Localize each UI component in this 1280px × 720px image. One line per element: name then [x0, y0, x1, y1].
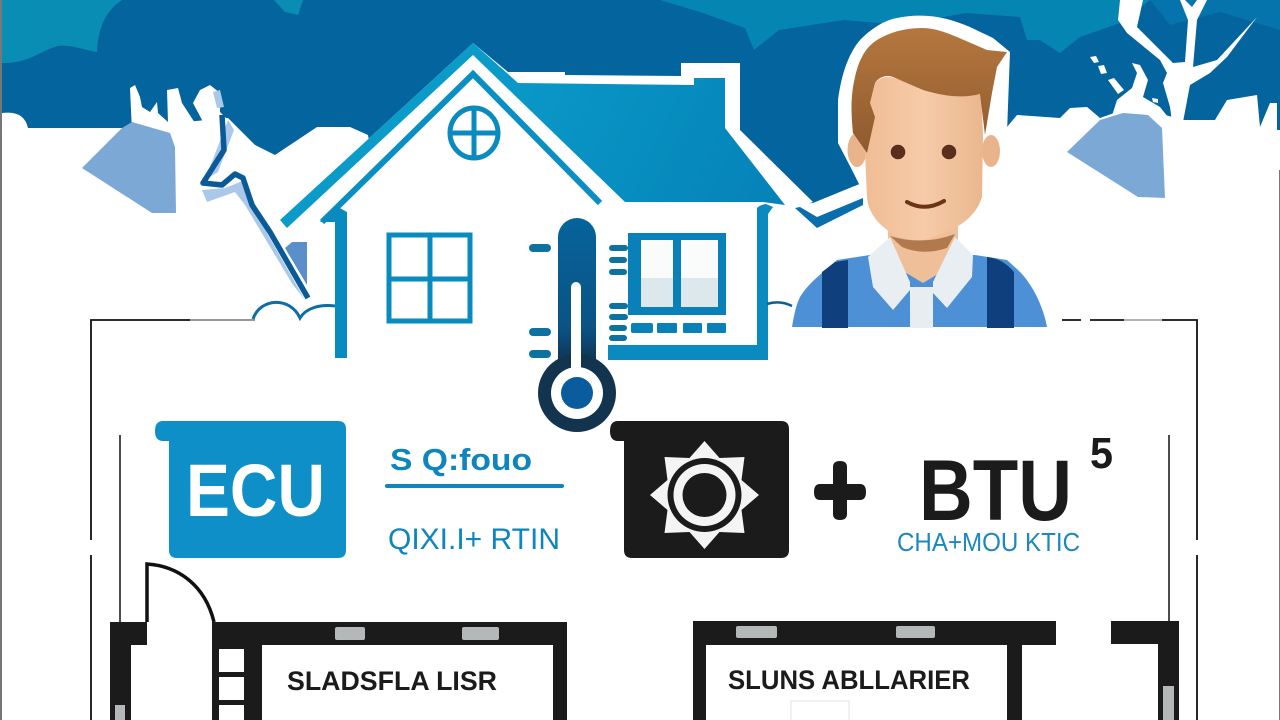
eyes: [891, 145, 905, 159]
small mark beside person: [767, 302, 792, 306]
ECU badge: ECU: [186, 449, 325, 532]
crack in the snow: [202, 90, 308, 300]
neck: [888, 225, 958, 283]
panel: left floor plan: [110, 622, 567, 720]
collar right: [933, 237, 973, 308]
ECU label text: [385, 442, 564, 556]
panel: far right wall: [1111, 621, 1179, 720]
house walls: [320, 204, 773, 360]
icon: blue rock left: [82, 122, 176, 213]
right window: [628, 233, 726, 315]
ECU label text: S Q:fouo: [390, 442, 532, 477]
thermometer tube: [558, 218, 596, 375]
round attic window: [450, 108, 498, 158]
thermometer bulb: [538, 354, 616, 432]
BTU heading: BTU: [919, 443, 1072, 539]
thermometer ticks: [529, 244, 628, 358]
faint square: [791, 701, 849, 720]
background: snowy landscape: [2, 95, 1280, 330]
ladder openings: [219, 649, 244, 720]
BTU caption: CHA+MOU KTIC: [897, 527, 1080, 557]
suspender right: [987, 257, 1014, 328]
ears: [848, 133, 866, 167]
shirt: [792, 255, 1047, 327]
background: winter sky: [0, 0, 1280, 235]
icon: blue rock right: [1067, 113, 1165, 198]
sun badge: [610, 421, 789, 558]
grey lights: [736, 626, 935, 638]
person: [792, 16, 1047, 328]
window sill blocks: [631, 323, 726, 333]
icon: sun: [650, 441, 759, 549]
panel title: SLUNS ABLLARIER: [728, 665, 970, 695]
ECU label text: QIXI.I+ RTIN: [388, 523, 560, 556]
snow hump outlines: [253, 302, 335, 319]
roof with outer line: [280, 43, 785, 228]
wall blocks: [693, 621, 1056, 720]
grey lights: [115, 627, 499, 720]
house body and white outline: [280, 43, 813, 360]
smile: [907, 201, 944, 207]
icon: bare tree right: [1090, 0, 1257, 122]
superscript mark: 5: [1090, 429, 1113, 478]
collar left: [868, 237, 910, 310]
left wall blocks: [110, 622, 567, 720]
house: [280, 43, 813, 360]
white halo: [838, 16, 1012, 262]
thermometer: [529, 218, 628, 432]
panel title: SLADSFLA LISR: [287, 666, 497, 696]
suspender left: [822, 260, 848, 328]
frame outline: [91, 320, 1197, 720]
ECU badge: [155, 421, 346, 558]
plus sign: [814, 461, 866, 520]
icon: bare tree left: [130, 85, 228, 132]
inner roof line: [322, 74, 600, 222]
left window: [389, 235, 470, 321]
checkmark at roof edge: [795, 198, 863, 228]
hair: [852, 28, 1007, 153]
face: [865, 77, 983, 240]
door arc: [147, 564, 214, 622]
small shrub: [1110, 63, 1172, 122]
panel: right floor plan: [693, 621, 1056, 720]
placket: [910, 287, 933, 328]
